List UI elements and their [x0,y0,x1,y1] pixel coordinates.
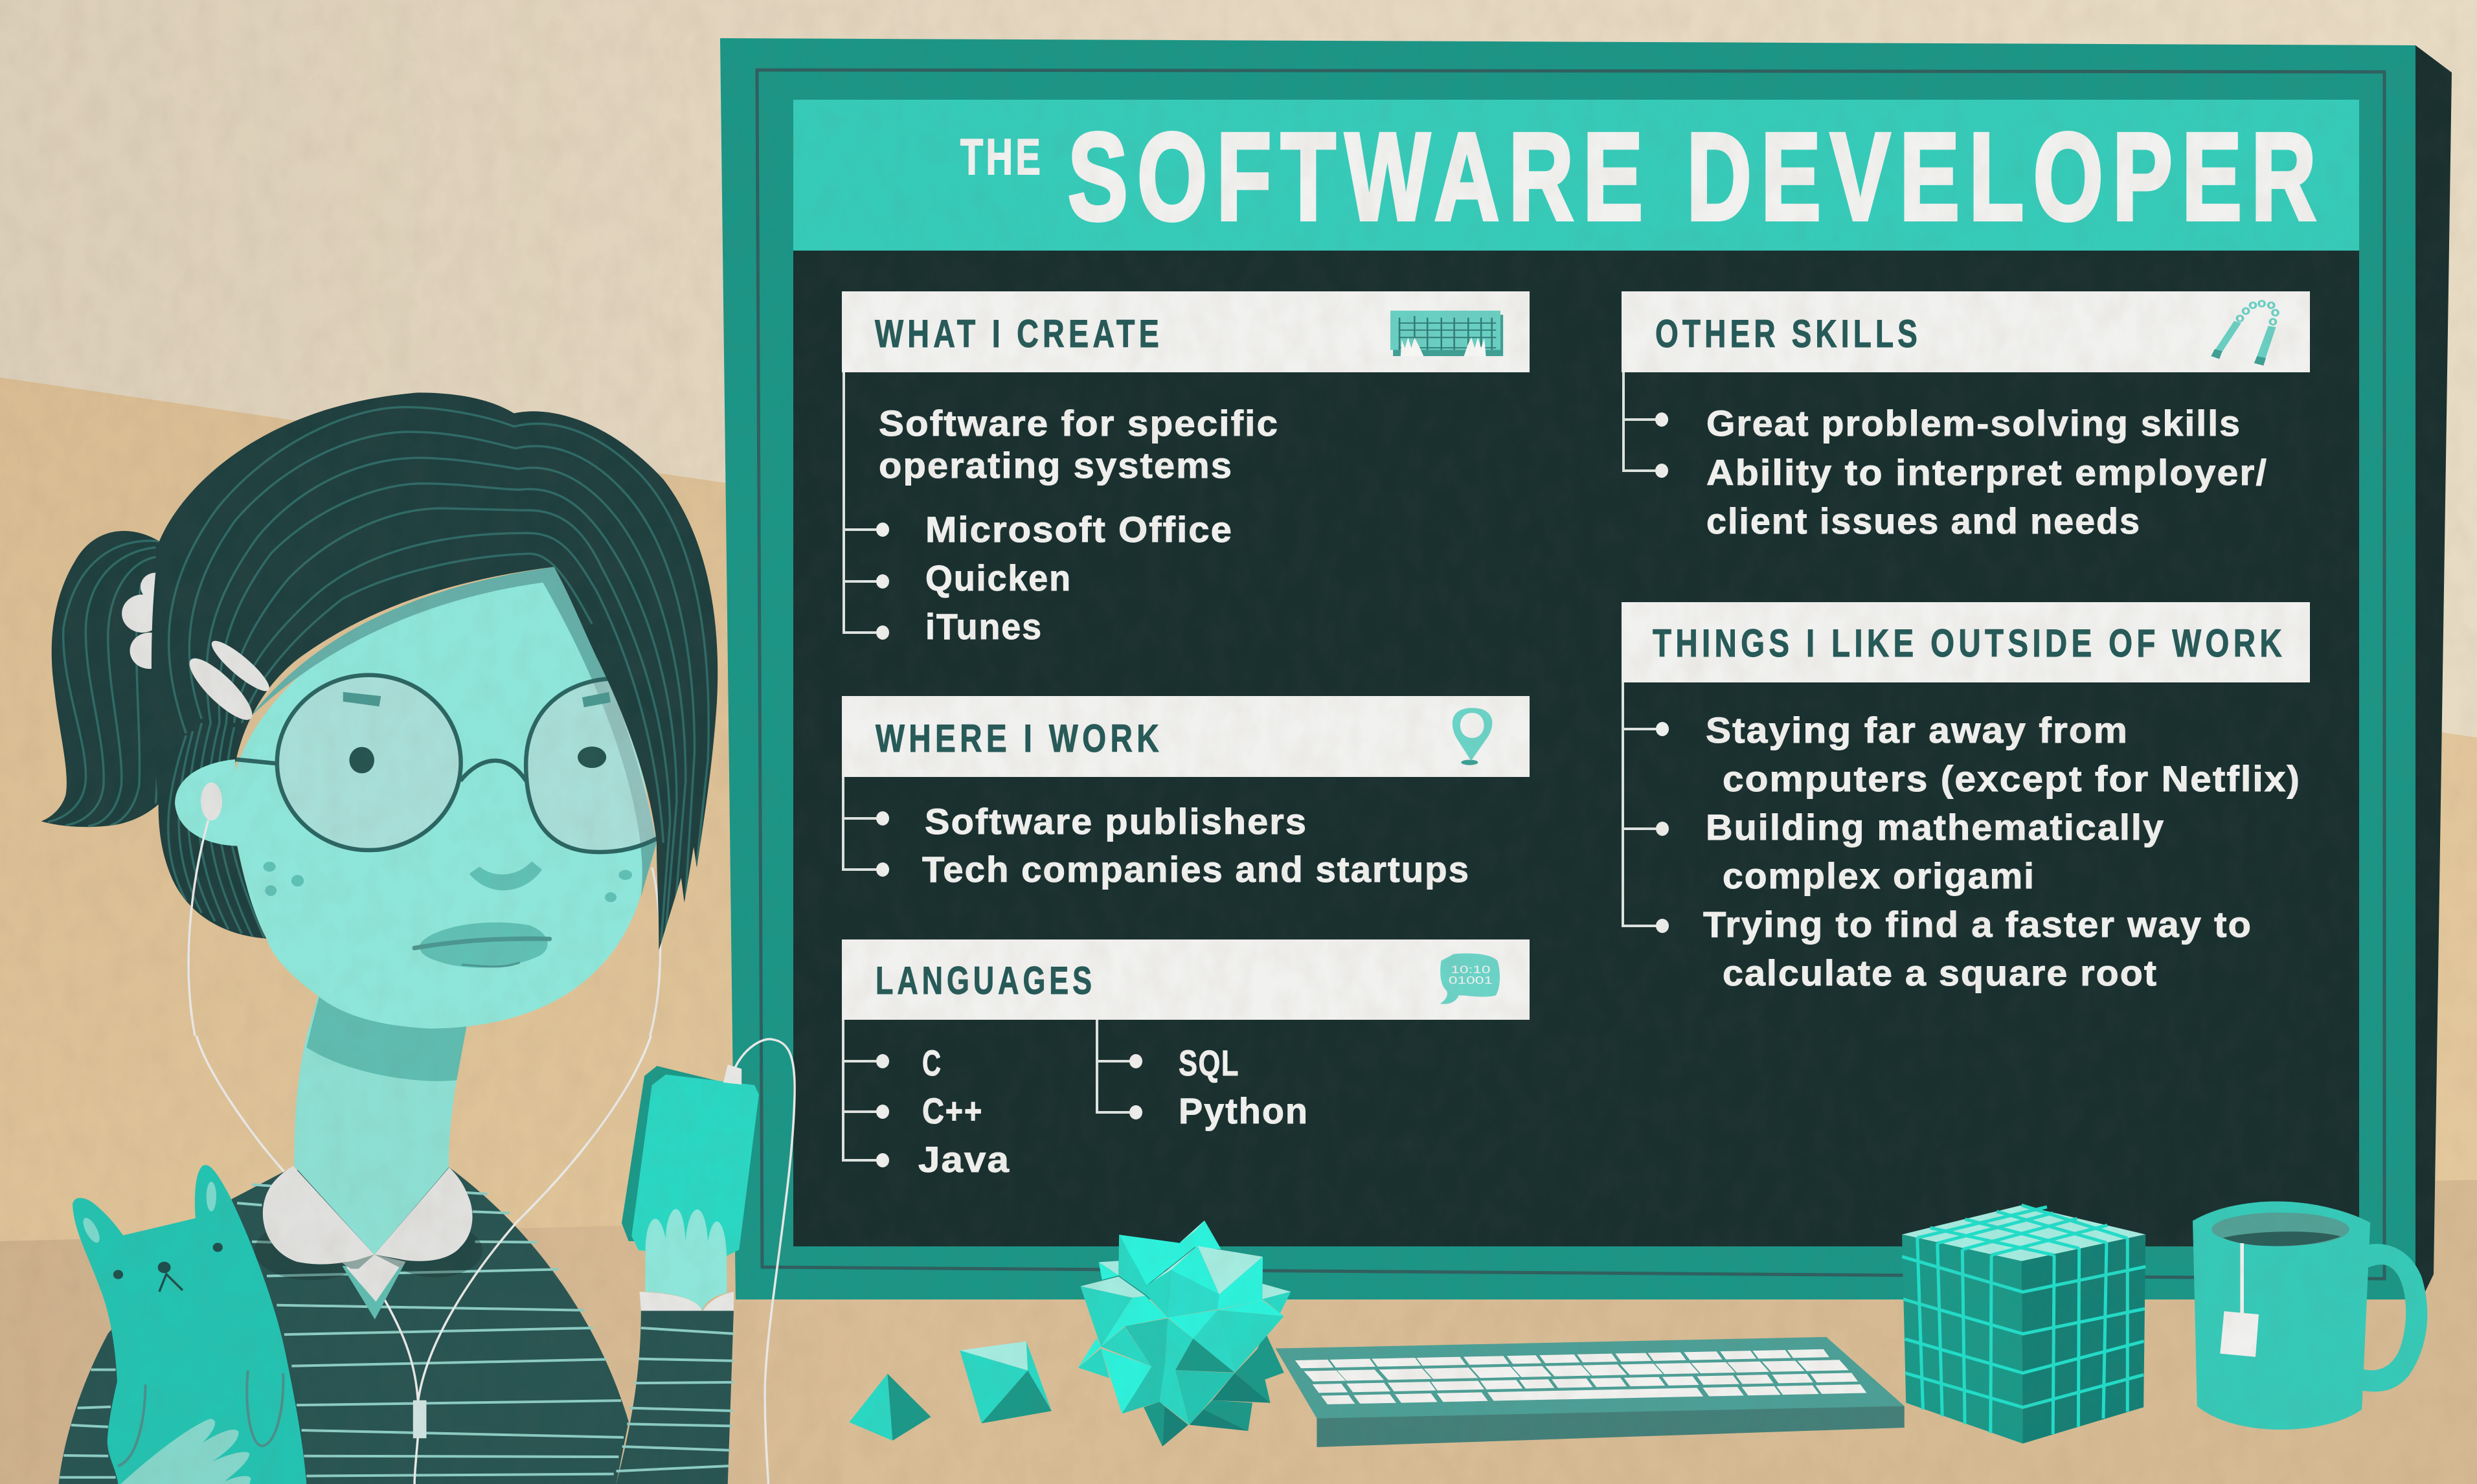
list text: C++ [922,1090,983,1131]
sleeve [616,1311,734,1484]
list text: complex origami [1723,855,2035,896]
background: lower wall [0,377,2477,1484]
list text: Ability to interpret employer/ [1706,452,2268,493]
list text [1703,710,2301,993]
list text [918,1042,1309,1180]
list text: Microsoft Office [925,509,1233,550]
list text: SQL [1179,1042,1239,1083]
monitor [720,38,2452,1299]
sweater stripes [60,1184,624,1478]
grid cube [1902,1205,2145,1443]
right earphone wire [650,868,661,1036]
freckles and nose [263,861,632,902]
character: head [41,392,718,1036]
connector lines [1622,372,1662,471]
forehead shadow [249,567,657,896]
list text: Tech companies and startups [922,849,1470,890]
monitor side [2415,45,2452,1295]
panel: languages [842,939,1530,1180]
bullets [1655,412,1668,478]
sweater [59,1167,629,1484]
collar shadow [254,1220,482,1280]
hair strands [168,407,708,942]
list text [922,801,1470,890]
icon: binary speech bubble: 01001 [1449,974,1493,986]
list text: calculate a square root [1723,952,2158,993]
list text: Quicken [925,557,1072,598]
cable remote [413,1400,426,1438]
list text: Python [1179,1090,1309,1131]
heading: things I like outside of work: THINGS I LIKE OUTSIDE OF WORK [1653,622,2286,665]
neck [294,967,477,1255]
monitor frame [720,38,2415,1299]
ponytail [41,531,159,827]
origami: spiky star [1078,1220,1291,1446]
list text: Java [918,1139,1010,1180]
ponytail strands [48,541,159,826]
title small word: THE [960,128,1043,185]
origami: faceted gem [960,1342,1052,1423]
icon: binary speech bubble [1440,954,1500,1004]
list text: Great problem-solving skills [1706,403,2241,444]
monitor screen [793,100,2359,1246]
neck shadow [306,967,477,1081]
sleeve stripes [616,1328,734,1471]
list text [1706,403,2268,541]
heading: languages: LANGUAGES [876,959,1096,1002]
icon: nunchucks [2211,300,2278,366]
hair tie [122,572,171,669]
icon: binary speech bubble: 10:10 [1451,964,1491,976]
phone [622,1064,759,1256]
ear [175,759,238,846]
player cable [735,1039,795,1484]
collar points [342,1255,405,1320]
cuff [640,1292,734,1311]
icon: map pin [1453,708,1492,765]
list text: client issues and needs [1706,500,2141,541]
background: desk [0,1180,2477,1484]
panel: other skills [1622,291,2310,541]
hand holding phone [646,1209,727,1311]
bullets [876,523,889,640]
face [231,583,650,1029]
front hair [152,392,718,950]
connector lines [842,777,883,870]
list text: Software publishers [925,801,1307,842]
panel: where I work [842,696,1530,890]
earphone cables [196,1036,651,1484]
list text: Trying to find a faster way to [1703,904,2252,945]
panel: what I create [842,291,1530,647]
bullets [1656,722,1669,933]
mug body [2193,1201,2370,1430]
cat plush [73,1165,306,1484]
connector lines [843,372,883,633]
earbud and left wire [188,782,222,1036]
bullets [876,1054,1142,1167]
tea mug [2193,1201,2427,1430]
glasses [235,675,657,852]
panel: things I like outside of work [1622,602,2310,993]
list text [879,403,1279,647]
hair clips [181,635,275,727]
title banner [793,100,2359,251]
mug opening [2211,1213,2349,1246]
monitor inner line [757,70,2384,1279]
icon: keyboard and hands [1390,311,1503,356]
origami: small pyramid [849,1374,931,1441]
connector lines [1622,682,1662,926]
heading: other skills: OTHER SKILLS [1655,312,1921,355]
list text: C [922,1042,941,1083]
character: body [59,967,795,1484]
heading: what I create: WHAT I CREATE [875,312,1163,355]
list text: Staying far away from [1706,710,2129,750]
bullets [876,811,889,877]
desk keyboard [1276,1337,1905,1447]
list text: operating systems [879,445,1233,486]
heading: where I work: WHERE I WORK [876,717,1163,760]
lips [414,923,550,968]
list text: Software for specific [879,403,1279,444]
tea bag string and tag [2220,1243,2259,1357]
list text: computers (except for Netflix) [1723,758,2301,799]
list text: Building mathematically [1706,807,2165,848]
mug handle [2361,1244,2427,1391]
connector lines [842,1020,1136,1160]
list text: iTunes [925,606,1043,647]
collar [263,1166,473,1265]
tea surface [2223,1231,2341,1246]
